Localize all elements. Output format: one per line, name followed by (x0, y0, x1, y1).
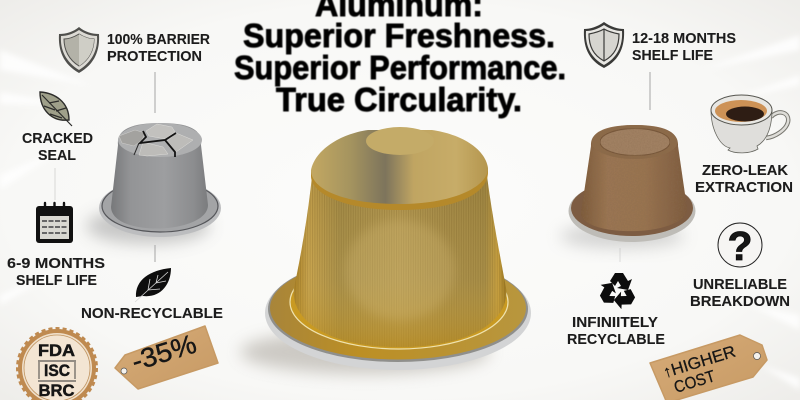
label: zero-leak extraction (695, 162, 793, 196)
label: cracked seal: CRACKED (22, 130, 93, 147)
badge: certifications seal: BRC (38, 381, 74, 400)
title: True Circularity. (276, 82, 522, 119)
icon: recycling arrows (595, 273, 638, 312)
price tag: higher cost: COST (672, 367, 717, 397)
capsule: grey cracked (86, 123, 221, 244)
label: 6-9 months shelf life: SHELF LIFE (16, 272, 97, 289)
badge: certifications seal: ISC (44, 361, 70, 380)
label: zero-leak extraction: ZERO-LEAK (702, 162, 788, 179)
label: unreliable breakdown: BREAKDOWN (690, 293, 790, 310)
label: 100% barrier protection: 100% BARRIER (107, 31, 210, 48)
label: zero-leak extraction: EXTRACTION (695, 179, 793, 196)
price tag: higher cost: ↑HIGHER (661, 343, 738, 382)
icon: shield, barrier protection (59, 27, 99, 73)
icon: shield, 12-18 months (584, 22, 624, 68)
label: 100% barrier protection (107, 31, 210, 65)
label: 6-9 months shelf life (7, 255, 105, 289)
label: infinitely recyclable: INFINIITELY (572, 314, 658, 331)
icon: question mark (718, 223, 762, 269)
title (234, 0, 566, 119)
label: unreliable breakdown: UNRELIABLE (693, 276, 787, 293)
label: infinitely recyclable (567, 314, 665, 348)
icon: black leaf (135, 268, 171, 302)
title: Superior Freshness. (243, 18, 555, 55)
title: Superior Performance. (234, 50, 566, 87)
capsule: brown compostable (560, 125, 696, 248)
label: 12-18 months shelf life: 12-18 MONTHS (632, 30, 736, 47)
price tag: -35%: -35% (128, 329, 200, 377)
label: cracked seal (22, 130, 93, 164)
badge: certifications seal: FDA (38, 341, 75, 360)
price tag: -35% (115, 326, 218, 389)
badge: certifications seal (18, 329, 96, 400)
label: infinitely recyclable: RECYCLABLE (567, 331, 665, 348)
capsule: gold aluminum (240, 127, 531, 374)
label: 6-9 months shelf life: 6-9 MONTHS (7, 255, 105, 272)
label: 12-18 months shelf life: SHELF LIFE (632, 47, 713, 64)
icon: coffee cup (711, 95, 788, 153)
icon: olive leaf (40, 92, 72, 126)
icon: calendar (36, 203, 73, 243)
label: 100% barrier protection: PROTECTION (107, 48, 202, 65)
icon: question mark: ? (727, 223, 753, 269)
label: non-recyclable: NON-RECYCLABLE (81, 305, 223, 322)
label: cracked seal: SEAL (38, 147, 76, 164)
price tag: higher cost (650, 335, 767, 400)
label: 12-18 months shelf life (632, 30, 736, 64)
label: unreliable breakdown (690, 276, 790, 310)
